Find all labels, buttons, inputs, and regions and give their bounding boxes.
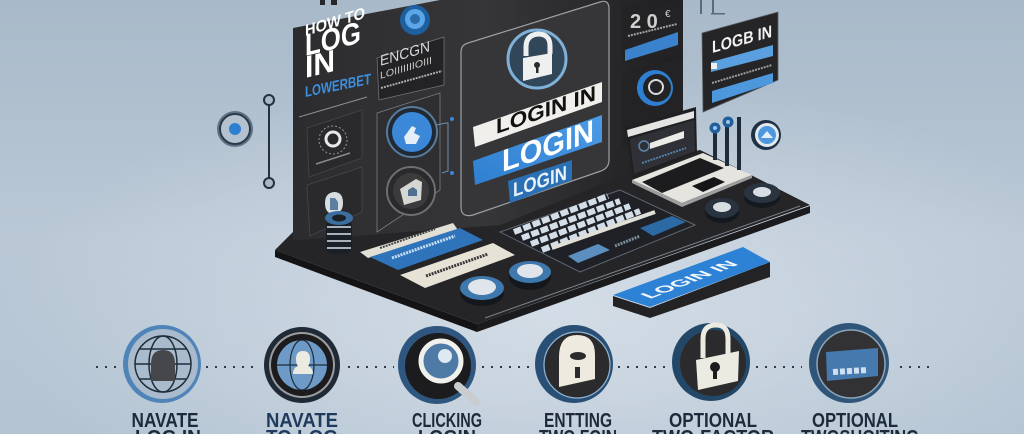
icon: magnifier	[398, 326, 476, 404]
platform form cards	[360, 223, 515, 288]
icon: lock circle	[508, 30, 566, 88]
brand name: LOWERBET	[305, 71, 372, 101]
step 4	[535, 325, 617, 434]
small blue login button: LOGIN	[513, 162, 567, 202]
white login button	[473, 81, 602, 147]
title block	[305, 4, 372, 101]
panel sub heading: LOIIIIIIIOIII	[380, 56, 432, 82]
white strip	[360, 223, 458, 258]
dotted connectors	[96, 366, 932, 368]
keys	[514, 196, 655, 250]
panel heading: ENCGN	[380, 38, 430, 70]
keyboard pad	[500, 190, 695, 272]
left small panel two	[307, 167, 362, 236]
icon: blue user circle	[387, 107, 437, 157]
cream strip	[400, 243, 515, 288]
title: how to: HOW TO	[305, 4, 365, 40]
platform	[275, 150, 810, 332]
step 5	[652, 323, 774, 434]
blue login button	[473, 113, 602, 185]
top blue badge	[400, 5, 430, 35]
step label: OPTIONAL	[669, 410, 757, 432]
step label: NAVATE	[266, 410, 338, 432]
laptop	[625, 107, 752, 207]
floating round icon right	[751, 120, 781, 150]
left small panel one	[307, 110, 362, 177]
upper right panel: 2 0	[630, 11, 658, 33]
platform buttons front	[460, 261, 551, 306]
icon: lock	[535, 325, 613, 403]
floating round icon left	[217, 111, 253, 147]
upper right panel: €	[665, 9, 671, 20]
step 6	[801, 323, 919, 434]
icon: code card	[809, 323, 889, 403]
connector with two nodes	[264, 95, 274, 188]
step 1	[123, 325, 201, 434]
connector	[436, 123, 448, 173]
blue strip	[370, 228, 483, 270]
slab label: LOGIN IN	[636, 259, 743, 300]
main login panel	[461, 1, 609, 216]
white login button: LOGIN IN	[496, 81, 596, 139]
step 3	[398, 326, 482, 434]
icon: dark tag circle	[387, 167, 435, 215]
card heading: LOGB IN	[712, 21, 772, 57]
title underline	[299, 97, 367, 117]
step 2	[264, 327, 340, 434]
step label: CLICKING	[412, 410, 482, 432]
floating log in slab	[613, 247, 770, 318]
step label: OPTIONAL	[812, 410, 898, 432]
text panel	[377, 37, 444, 100]
icon: globe avatar	[264, 327, 340, 403]
step label: ENTTING	[544, 410, 612, 432]
login card	[702, 12, 778, 112]
title: log: LOG	[305, 15, 361, 63]
step label: NAVATE	[132, 410, 198, 432]
step timeline	[96, 323, 932, 434]
middle icon panel	[377, 93, 454, 232]
icon: padlock	[672, 323, 750, 401]
platform buttons right	[705, 183, 780, 223]
top cropped fragments	[320, 0, 725, 14]
title: in: IN	[305, 43, 335, 85]
back wall	[293, 0, 683, 240]
middle right icon panel	[622, 57, 683, 148]
blue login button: LOGIN	[502, 113, 594, 179]
antenna posts	[710, 116, 741, 170]
cylinder stack	[325, 211, 353, 254]
upper right panel	[622, 0, 683, 63]
icon: globe user	[123, 325, 201, 403]
